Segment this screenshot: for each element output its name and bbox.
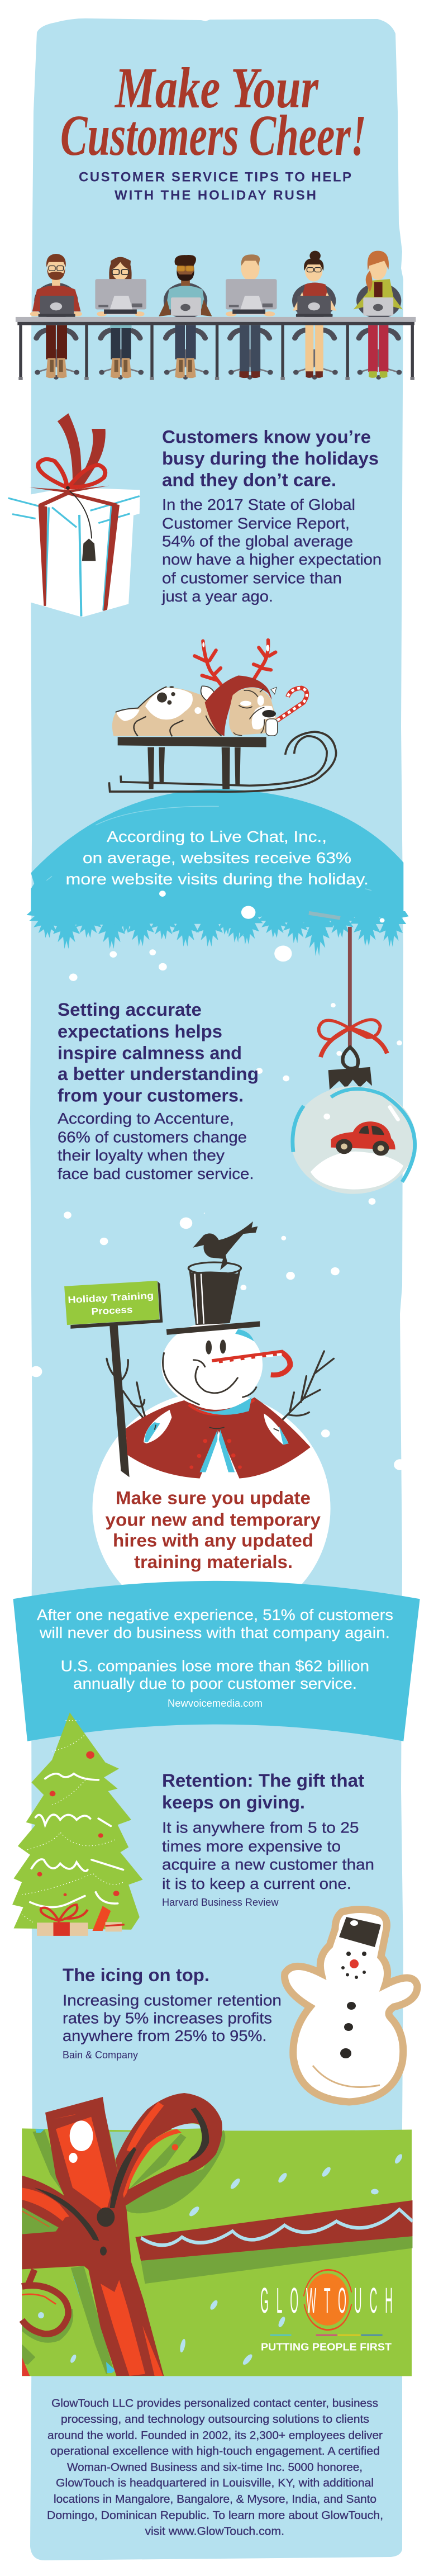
panel: teal banner: [13, 1581, 420, 1741]
person 5: woman with bun and laptop: [292, 251, 338, 380]
curl: [22, 2270, 68, 2334]
text: about GlowTouch: Woman-Owned Business and six-time Inc. 5000 honoree,: [67, 2461, 363, 2474]
heading: [58, 1000, 259, 1106]
cape: [126, 1398, 311, 1479]
text: update training materials: Make sure you update: [116, 1488, 311, 1508]
text: about GlowTouch: locations in Mangalore, Bangalore, & Mysore, India, and Santo: [54, 2493, 376, 2506]
dog face: [229, 687, 278, 736]
body: [161, 496, 382, 605]
text: about GlowTouch: [47, 2398, 383, 2538]
body: times more expensive to: [162, 1838, 341, 1855]
subtitle: WITH THE HOLIDAY RUSH: [115, 188, 316, 203]
heading: a better understanding: [58, 1064, 259, 1084]
body: 66% of customers change: [58, 1129, 247, 1146]
body: [162, 1819, 374, 1892]
body: their loyalty when they: [58, 1147, 225, 1164]
text: update training materials: [105, 1488, 321, 1572]
heading: from your customers.: [58, 1086, 244, 1106]
illustration: gift box: [8, 413, 140, 617]
right ribbon: [135, 2200, 412, 2261]
ornament cap: [328, 1047, 372, 1090]
snow dots: [30, 1198, 406, 1470]
illustration: customer service team at desk: [16, 251, 416, 380]
sign text: [68, 1290, 155, 1318]
heading: busy during the holidays: [162, 448, 379, 468]
logo wordmark: [260, 2281, 393, 2353]
heading: [162, 1770, 364, 1812]
source: Bain & Company: [63, 2049, 138, 2061]
glass ball: [291, 1086, 416, 1194]
text: negative experience stats: [37, 1606, 393, 1709]
text: about GlowTouch: processing, and technology outsourcing solutions to clients: [61, 2413, 369, 2426]
ornament bow: [319, 1020, 387, 1057]
panel: teal dome: [31, 789, 403, 915]
reindeer hat and antlers: [194, 640, 275, 736]
body: rates by 5% increases profits: [63, 2009, 272, 2026]
illustration: christmas tree: [12, 1712, 143, 1936]
text: update training materials: hires with any updated: [113, 1531, 313, 1551]
source: Harvard Business Review: [162, 1897, 279, 1908]
heading: Setting accurate: [58, 1000, 202, 1020]
left loop: [22, 2176, 99, 2266]
body: It is anywhere from 5 to 25: [162, 1819, 359, 1836]
person 2: woman behind monitor: [95, 257, 146, 380]
text: icing on top: [63, 1965, 282, 2061]
body: In the 2017 State of Global: [162, 496, 355, 513]
gift wrap flakes and logo art: [38, 2152, 403, 2366]
heading: [162, 427, 379, 490]
presents under tree: [37, 1905, 125, 1936]
text: update training materials: training materials.: [134, 1552, 293, 1572]
subtitle: [79, 170, 351, 203]
text: live chat stat: According to Live Chat, Inc.,: [107, 828, 327, 845]
sled: [109, 732, 336, 792]
shadows: [22, 2130, 225, 2374]
body: just a year ago.: [161, 588, 273, 605]
illustration: snowman with sign: [30, 1198, 406, 1625]
illustration: big ribbon bow: [22, 2093, 225, 2376]
body: face bad customer service.: [58, 1165, 254, 1182]
red car: [331, 1121, 395, 1156]
source: Newvoicemedia.com: [168, 1698, 263, 1709]
candy cane: [278, 688, 307, 720]
person 4: man from behind monitor: [226, 254, 277, 380]
panel: gift wrap: [22, 2128, 412, 2376]
body: 54% of the global average: [162, 533, 353, 550]
ornament ribbon: [348, 927, 352, 1049]
snow flakes: [38, 2152, 403, 2366]
heading: expectations helps: [58, 1021, 222, 1041]
dog body: [112, 687, 222, 736]
snow garlands: [30, 1774, 123, 1907]
dark streaks and knot: [35, 2147, 136, 2241]
text: live chat stat: more website visits during the holiday.: [66, 870, 369, 888]
crow: [193, 1221, 258, 1270]
tagline: PUTTING PEOPLE FIRST: [261, 2342, 392, 2353]
twig arms: [107, 1351, 333, 1428]
illustration: snowman cookie: [285, 1909, 417, 2102]
right loop: [116, 2093, 222, 2206]
illustration: bulldog on a sled: [109, 640, 336, 792]
heading: and they don’t care.: [162, 470, 336, 490]
heading: inspire calmness and: [58, 1043, 242, 1063]
text: about GlowTouch: operational excellence with high-touch engagement. A certified: [50, 2445, 380, 2457]
logo wordmark: GLOWTOUCH: [260, 2281, 393, 2321]
text: negative experience stats: After one negative experience, 51% of customers: [37, 1606, 393, 1623]
fir fringe: [27, 911, 409, 956]
right ribbon shadow: [141, 2236, 412, 2284]
ribbon icing scallop: [141, 2209, 412, 2245]
snow dots and streak over dome: [69, 891, 402, 1081]
heading: Retention: The gift that: [162, 1770, 364, 1791]
text: negative experience stats: will never do business with that company again.: [39, 1624, 390, 1641]
body: According to Accenture,: [58, 1110, 234, 1127]
text: customers know: [161, 427, 382, 605]
logo sun: [304, 2270, 351, 2330]
subtitle: CUSTOMER SERVICE TIPS TO HELP: [79, 170, 351, 184]
body: of customer service than: [162, 570, 342, 587]
body: it is to keep a current one.: [162, 1875, 351, 1892]
text: setting accurate expectations: [58, 1000, 259, 1182]
text: about GlowTouch: visit www.GlowTouch.com.: [145, 2526, 284, 2538]
sign text: Holiday Training: [68, 1290, 154, 1305]
heading: The icing on top.: [63, 1965, 209, 1985]
person 3: man with curly hair and laptop: [159, 255, 212, 380]
title line 1: Make Your: [114, 56, 319, 120]
sign post: [109, 1324, 130, 1477]
person 1: bearded man with laptop: [30, 254, 82, 380]
body: Customer Service Report,: [162, 514, 350, 532]
corner red: [22, 2357, 30, 2376]
body: now have a higher expectation: [162, 551, 382, 568]
body: Increasing customer retention: [63, 1992, 282, 2009]
text: retention: [162, 1770, 374, 1908]
person 6: woman with red hair and green jacket: [354, 251, 403, 380]
title: [60, 56, 366, 168]
heading: Customers know you’re: [162, 427, 371, 447]
text: live chat stat: [66, 828, 369, 888]
sign board: [64, 1281, 163, 1329]
text: negative experience stats: U.S. companies lose more than $62 billion: [61, 1658, 369, 1675]
body: [63, 1992, 282, 2044]
green wrap: [22, 2128, 412, 2376]
text: about GlowTouch: around the world. Founded in 2002, its 2,300+ employees deliver: [47, 2430, 383, 2442]
sign text: Process: [91, 1304, 133, 1317]
body: anywhere from 25% to 95%.: [63, 2027, 267, 2044]
heading: keeps on giving.: [162, 1792, 305, 1812]
top hat: [166, 1262, 260, 1335]
text: negative experience stats: annually due to poor customer service.: [73, 1675, 357, 1692]
vertical ribbon: [22, 2097, 164, 2376]
text: about GlowTouch: GlowTouch is headquartered in Louisville, KY, with additional: [56, 2477, 374, 2489]
body: [58, 1110, 254, 1182]
snowman head: [161, 1323, 290, 1407]
desk: [16, 317, 416, 380]
illustration: ornament with red car: [291, 927, 416, 1194]
text: live chat stat: on average, websites receive 63%: [83, 849, 351, 866]
text: update training materials: your new and temporary: [105, 1509, 321, 1530]
text: about GlowTouch: GlowTouch LLC provides personalized contact center, business: [51, 2398, 378, 2410]
body: acquire a new customer than: [162, 1856, 374, 1873]
text: about GlowTouch: Domingo, Dominican Republic. To learn more about GlowTouch,: [47, 2509, 383, 2522]
snowman body: [93, 1392, 331, 1625]
logo rule lines: [270, 2334, 292, 2336]
